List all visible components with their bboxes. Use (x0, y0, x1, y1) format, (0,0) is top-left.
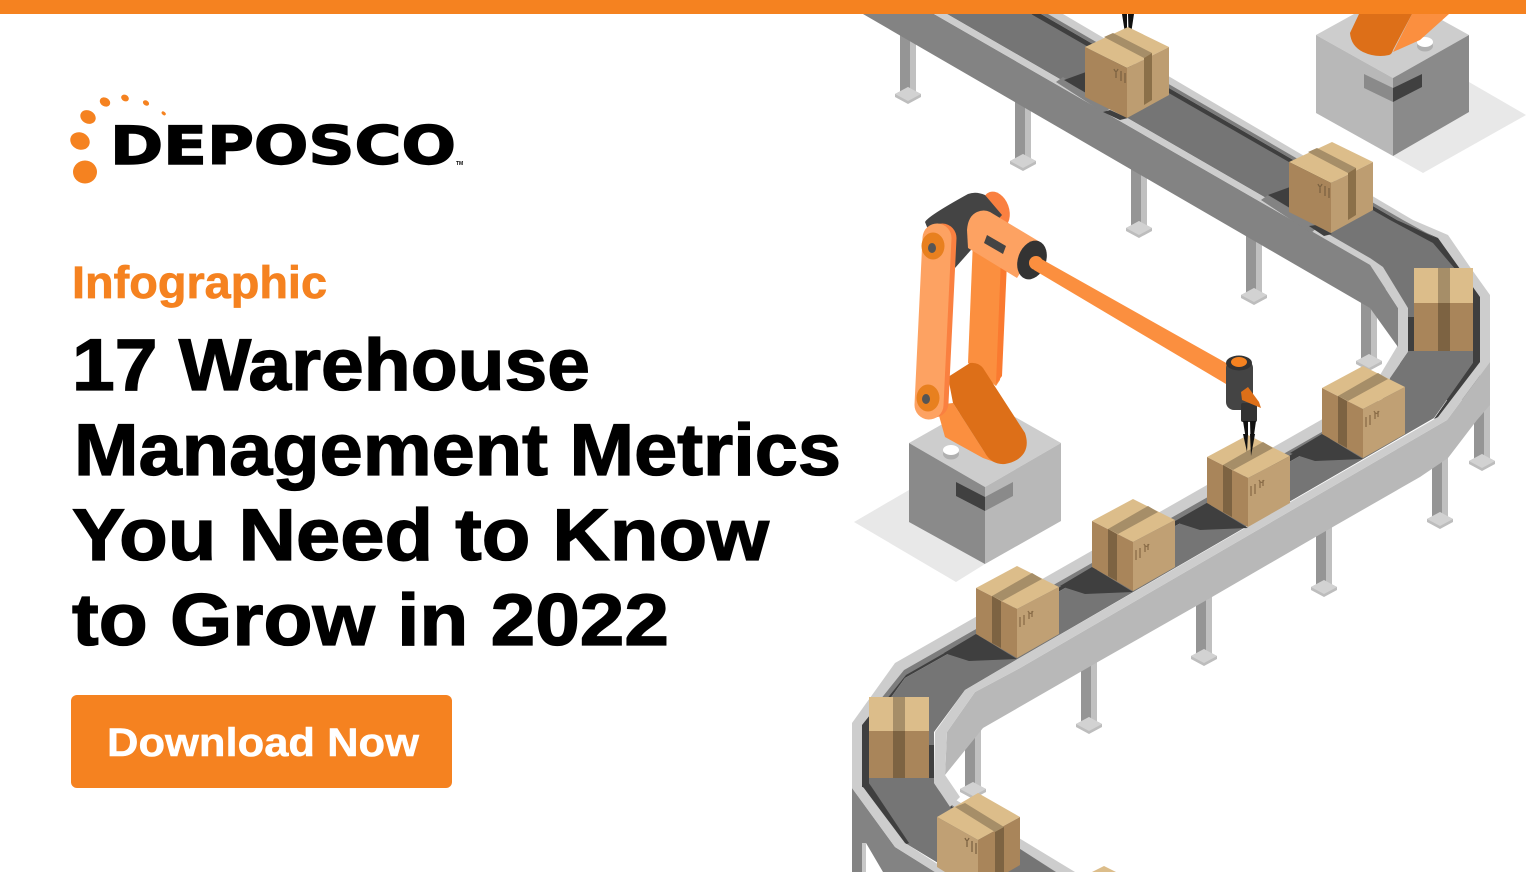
base lighter side (936, 403, 997, 463)
back rail, lower section (852, 345, 1408, 788)
top gripper (1122, 14, 1134, 47)
button: Download Now (71, 695, 452, 788)
button: Download Now: Download Now (107, 721, 420, 765)
bottom side panel (852, 788, 935, 872)
upper edge strip (934, 14, 1408, 352)
rear orange disc (977, 188, 1015, 232)
station base (1316, 14, 1469, 156)
illustration: conveyor belt (852, 14, 1495, 872)
conveyor legs (895, 20, 1495, 799)
station button (1417, 37, 1433, 52)
upper side panel (863, 14, 1398, 347)
base dark wedge (948, 363, 1027, 464)
dark line at right curve (1434, 362, 1481, 419)
shadow slivers under boxes (1103, 110, 1332, 236)
dark line at left curve (863, 783, 909, 845)
box on bottom belt 2 (1092, 866, 1116, 872)
arm slot (984, 235, 1006, 254)
lower side panel (945, 362, 1490, 775)
logo icon: orange dots (67, 93, 167, 184)
box on bottom belt 1 (937, 793, 1020, 872)
box on upper belt 1 (1064, 27, 1169, 118)
front-facing box on left curve (869, 697, 934, 778)
upper arm cylinder (967, 210, 1040, 278)
arm rod (1034, 256, 1228, 384)
box on upper belt 2 (1268, 142, 1373, 233)
front link (929, 238, 942, 405)
headline line 4: to Grow in 2022 (72, 580, 669, 661)
headline line 2: Management Metrics (74, 410, 841, 491)
robot arm (916, 188, 1261, 464)
back link (968, 240, 1007, 386)
dark shoulder cylinder (925, 193, 1002, 272)
effector wedge (1241, 387, 1261, 408)
bottom leg highlight (862, 843, 866, 872)
lower joint (916, 384, 940, 412)
headline line 1: 17 Warehouse (72, 325, 590, 406)
box on lower belt 1 (1290, 366, 1405, 461)
floor pad (1393, 82, 1526, 173)
lower edge strip (934, 362, 1490, 807)
floor pad (854, 490, 985, 582)
gripper fingers over box (1243, 434, 1255, 456)
upper strip gaps at boxes (1056, 77, 1319, 233)
upper joint (922, 232, 944, 260)
bottom edge strip (852, 787, 950, 872)
effector gripper (1241, 403, 1257, 456)
logo trademark: TM (456, 161, 463, 167)
robot arm base (1350, 14, 1449, 56)
logo wordmark: DEPOSCO (110, 116, 456, 177)
arm end cap (1012, 236, 1052, 284)
robot station, top right (1316, 14, 1526, 173)
box on lower belt 4 (944, 566, 1059, 661)
headline (72, 325, 841, 661)
arm effector head (1226, 356, 1253, 410)
robot station, left (854, 188, 1261, 582)
station button (943, 445, 959, 460)
logo: Deposco (67, 93, 463, 184)
top orange bar (0, 0, 1526, 14)
back rail, bottom section (925, 780, 1075, 872)
station base (909, 400, 1061, 564)
box on lower belt 3 (1060, 499, 1175, 594)
front-facing box on right curve (1408, 268, 1473, 351)
eyebrow: Infographic: Infographic (72, 257, 327, 308)
conveyor belt surface (869, 14, 1473, 872)
back rail, upper section (1031, 14, 1490, 400)
headline line 3: You Need to Know (72, 495, 769, 576)
arm-gripped box (1175, 435, 1290, 530)
